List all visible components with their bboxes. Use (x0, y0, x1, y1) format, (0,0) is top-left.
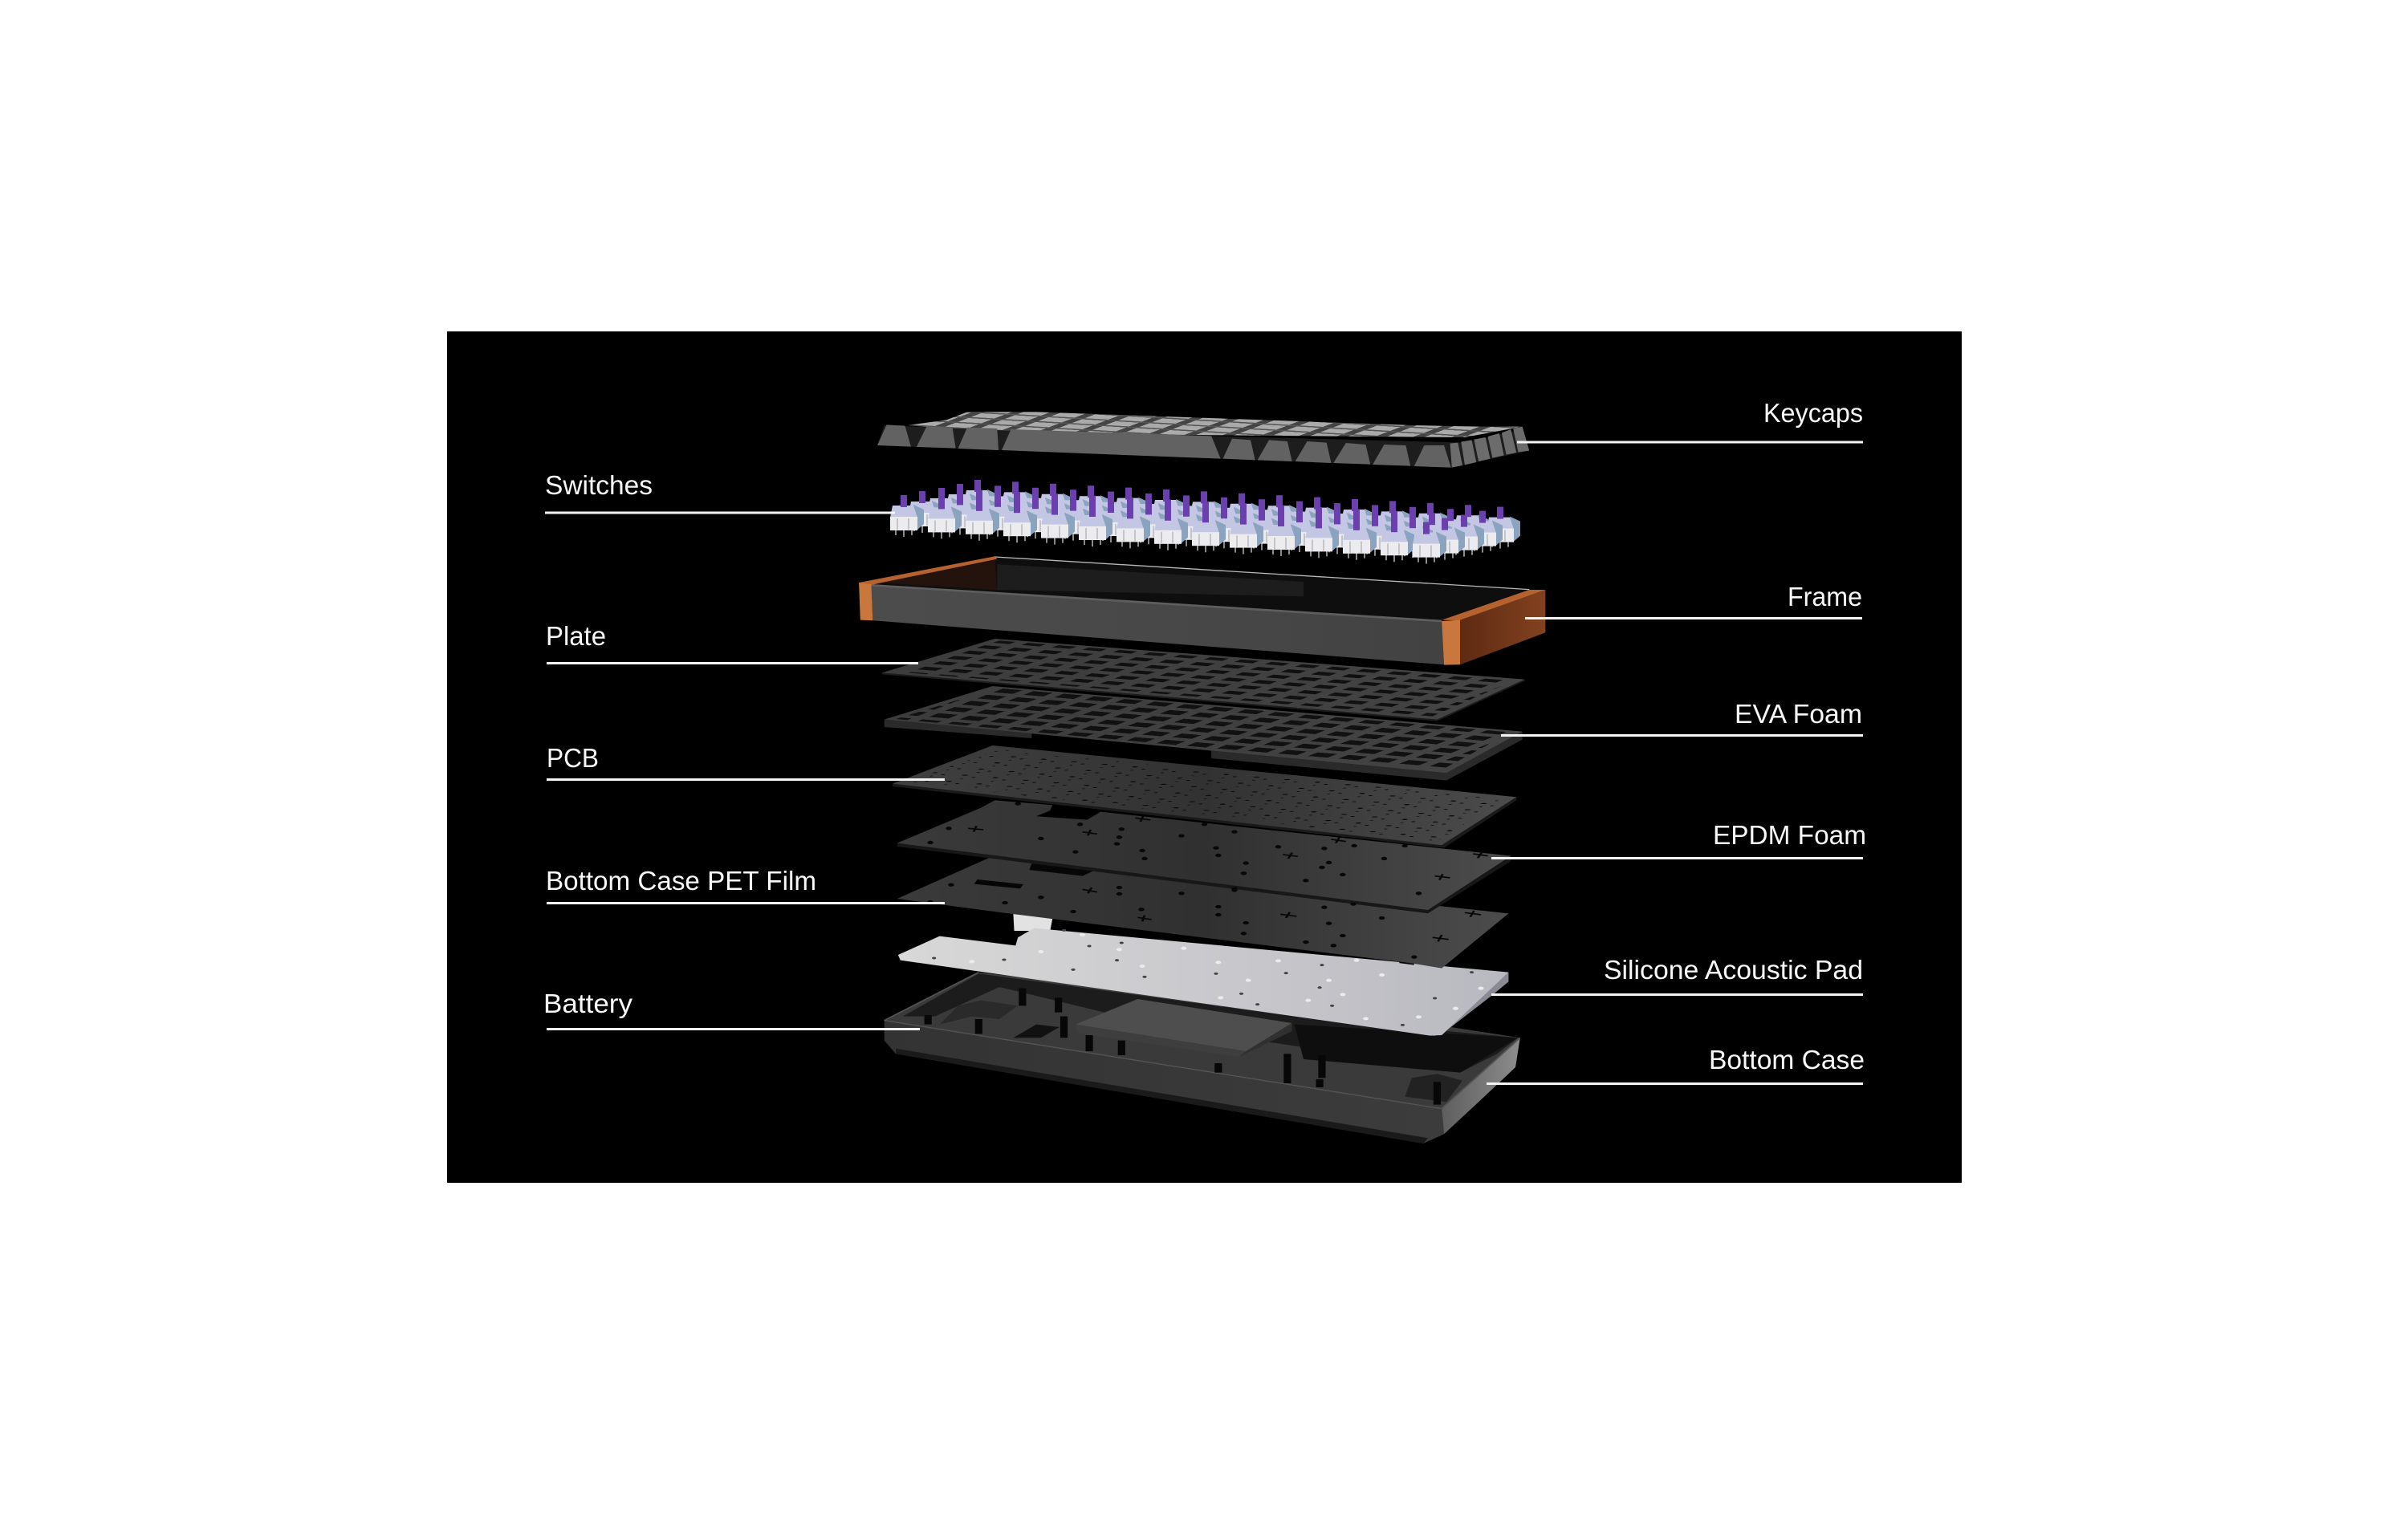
label: Switches: Switches (545, 470, 653, 500)
case floor and inner walls (885, 973, 1520, 1109)
EPDM foam (897, 800, 1511, 913)
label: EPDM Foam: EPDM Foam (1713, 820, 1866, 850)
case front face (885, 1021, 1444, 1143)
bottom case PET film (897, 857, 1508, 969)
EVA foam (885, 686, 1523, 781)
film sheet (897, 857, 1508, 969)
label: EPDM Foam (1491, 820, 1866, 859)
label: PCB: PCB (547, 743, 599, 773)
label: EVA Foam (1501, 699, 1863, 737)
frame back rim (995, 557, 1529, 590)
foam edge (897, 843, 1511, 913)
frame (859, 556, 1545, 665)
label: Silicone Acoustic Pad (1491, 955, 1863, 996)
keycap tops (907, 412, 1523, 437)
plate key cutouts (898, 640, 1513, 717)
pad side (1433, 973, 1508, 1036)
EVA side wall (885, 720, 1523, 781)
label: Bottom Case: Bottom Case (1709, 1045, 1865, 1074)
label: Keycaps (1517, 398, 1863, 443)
case rim (885, 973, 1520, 1109)
left inner wood (880, 559, 997, 590)
EVA key cells (896, 688, 1511, 770)
right wood corner (1442, 620, 1460, 665)
left wood end (859, 583, 872, 620)
pad dark marks (934, 930, 1472, 1025)
case right side (1442, 1038, 1520, 1134)
case connector details (940, 1001, 1018, 1025)
keycaps (877, 412, 1529, 468)
film cutouts (1029, 863, 1094, 876)
film crosses (1082, 887, 1481, 965)
label: Battery: Battery (543, 989, 633, 1018)
label: Plate: Plate (546, 621, 606, 651)
frame front face (872, 584, 1444, 664)
label: EVA Foam: EVA Foam (1735, 699, 1862, 729)
right wood side (1460, 590, 1545, 664)
film holes (930, 885, 1414, 957)
label: PCB (547, 743, 945, 781)
plate face (882, 639, 1525, 720)
battery (1076, 999, 1292, 1057)
PCB (893, 745, 1516, 848)
label: Bottom Case PET Film: Bottom Case PET Film (546, 866, 816, 896)
label: Plate (546, 621, 918, 664)
plate (882, 639, 1525, 721)
white internal tab (1013, 913, 1052, 931)
label: Switches (545, 470, 895, 514)
foam sheet (897, 800, 1511, 910)
bottom case (885, 973, 1520, 1143)
top left wood edge (859, 556, 997, 585)
case back walls (903, 973, 1518, 1073)
foam holes (930, 804, 1419, 904)
front row keys (877, 424, 1451, 468)
frame interior (872, 558, 1529, 620)
label: Frame: Frame (1788, 582, 1862, 611)
label: Bottom Case (1487, 1045, 1865, 1085)
label: Keycaps: Keycaps (1763, 398, 1863, 428)
foam crosses (968, 816, 1488, 880)
plate edge (882, 672, 1525, 721)
PCB edge (893, 784, 1516, 848)
label: Bottom Case PET Film (546, 866, 945, 904)
right wood top edge (1442, 590, 1545, 620)
pad top (898, 928, 1508, 1036)
pad posts (972, 935, 1481, 1018)
EVA top face (885, 686, 1523, 773)
keycap dark base (877, 425, 1529, 468)
case posts and standoffs (928, 989, 1437, 1105)
label: Silicone Acoustic Pad: Silicone Acoustic Pad (1604, 955, 1863, 985)
panel: black background (447, 331, 1962, 1183)
silicone acoustic pad (898, 913, 1508, 1036)
right column keys (1450, 427, 1529, 468)
label: Battery (543, 989, 920, 1030)
label: Frame (1525, 582, 1862, 619)
PCB board (893, 745, 1516, 845)
switches (890, 480, 1520, 564)
case corner mount (1405, 1074, 1462, 1102)
PCB contact holes (905, 749, 1504, 841)
